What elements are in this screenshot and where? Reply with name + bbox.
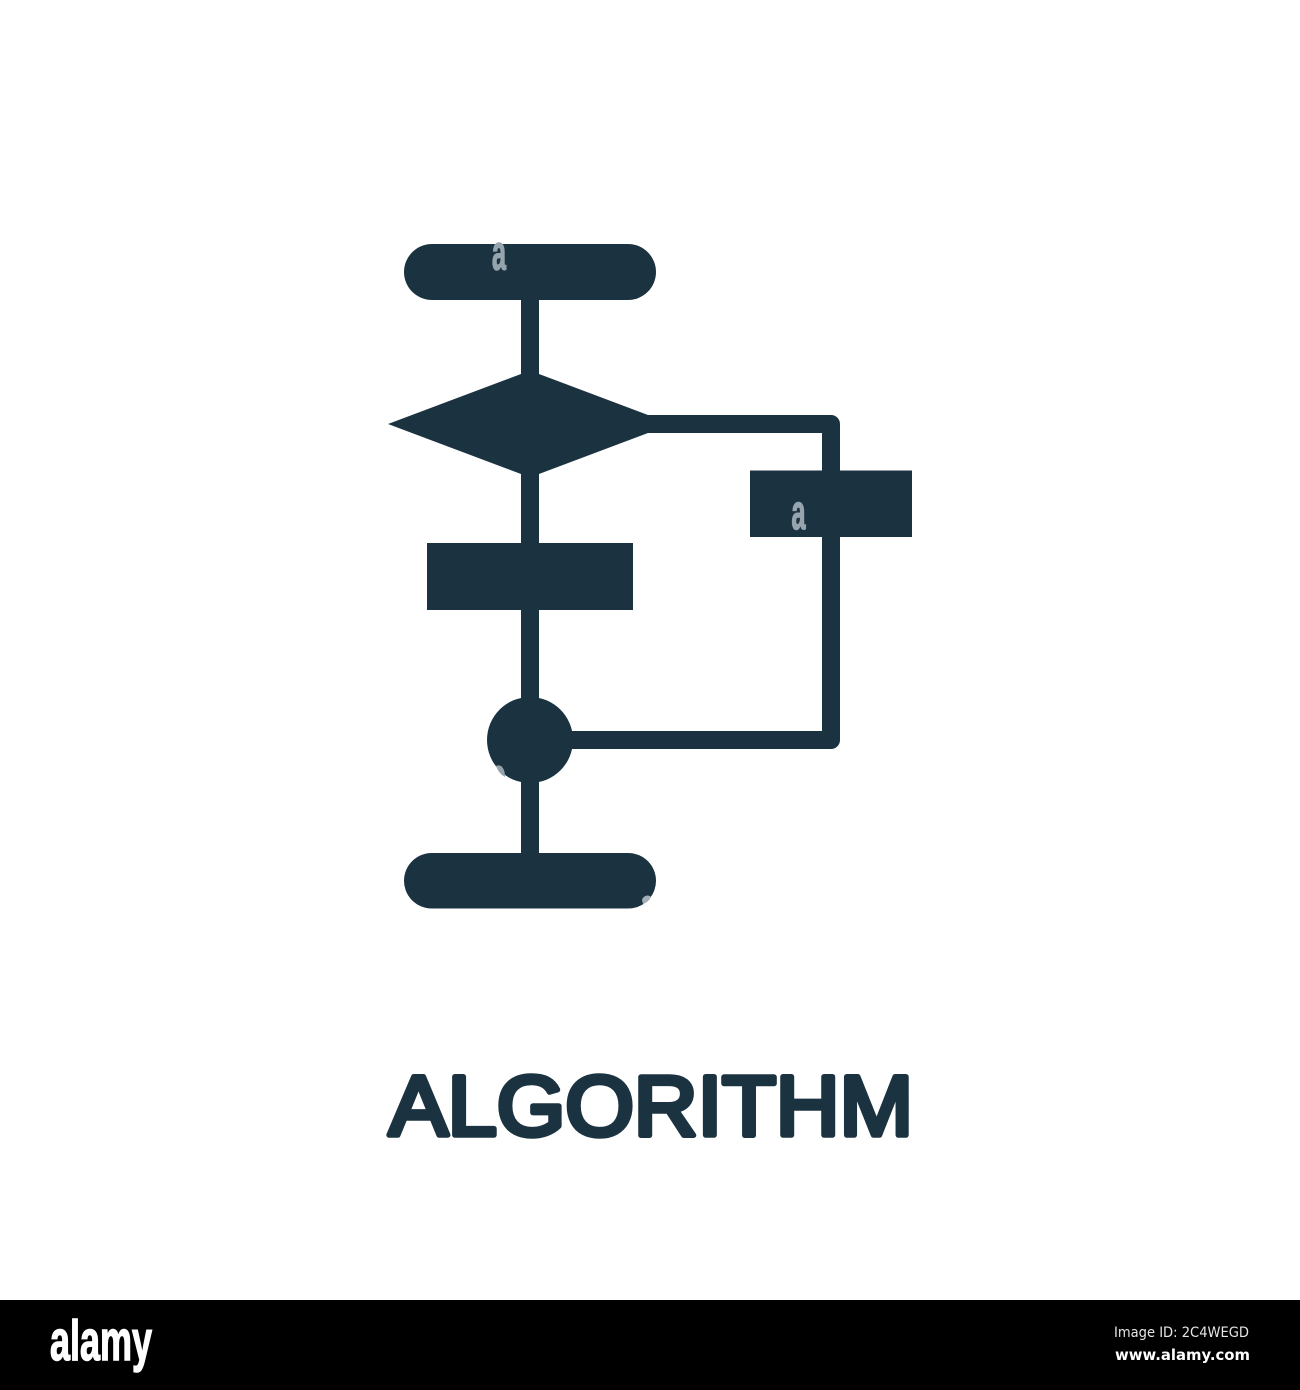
watermark letter on start terminator: a [492,226,506,280]
watermark letter on right process box: a [792,486,806,540]
title: ALGORITHM: ALGORITHM [389,1059,913,1153]
watermark fragment on end terminator [642,896,651,904]
flowchart decision diamond [388,371,672,477]
flowchart connector: feedback loop [560,424,831,740]
icon: algorithm flowchart [388,244,912,908]
footer logo: alamy: alamy [50,1309,152,1373]
flowchart connector: main vertical line [521,280,539,880]
footer text: image ID: Image ID: 2C4WEGD [1114,1325,1249,1341]
flowchart connector node circle [487,697,573,783]
flowchart end terminator [404,853,656,908]
flowchart start terminator [404,244,656,300]
footer bar [0,1300,1300,1390]
footer text: website: www.alamy.com [1115,1346,1250,1364]
watermark fragment on circle [496,765,505,777]
flowchart process box: right [750,470,912,537]
flowchart process box: left [427,543,633,610]
